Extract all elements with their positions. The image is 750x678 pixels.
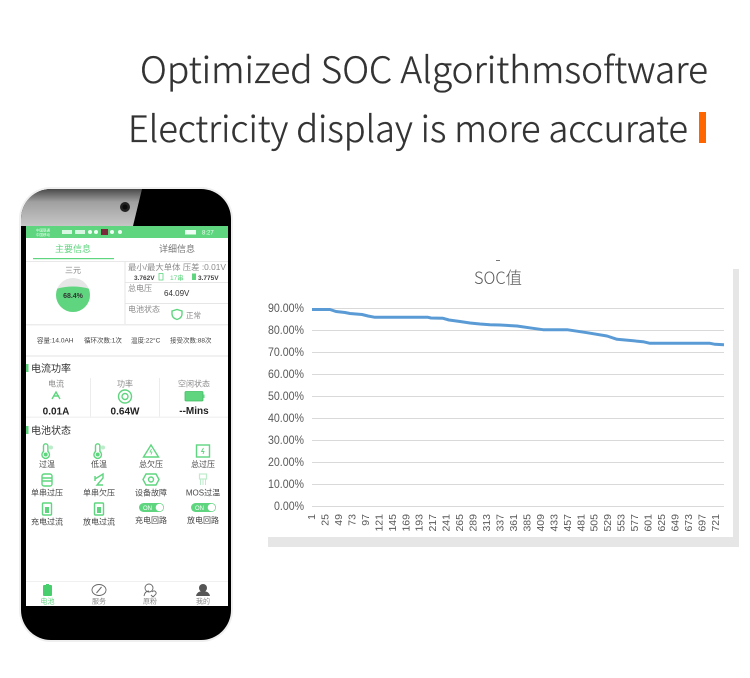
idle state metric: --Mins: [179, 406, 209, 417]
nav: service: [92, 584, 106, 606]
x axis labels: 673: [683, 514, 695, 532]
x axis labels: 625: [656, 514, 668, 532]
tabs: 主要信息: [55, 243, 91, 254]
status bar: 中国移动: [36, 232, 50, 237]
y axis labels: 60.00%: [268, 369, 304, 381]
icon: total over voltage: 总过压: [191, 459, 215, 469]
subtitle: electricity display is more accurate: Electricity display is more accurate: [128, 100, 688, 153]
icon: over temperature: [39, 444, 55, 469]
heading: battery status: 电池状态: [31, 424, 71, 437]
current metric: 0.01A: [43, 406, 69, 418]
icon: MOS over temperature: [186, 474, 220, 498]
line chart: SOC value: [268, 260, 739, 547]
total voltage: 64.09V: [164, 289, 190, 298]
y axis labels: 10.00%: [268, 479, 304, 491]
cell voltage panel: [128, 262, 227, 282]
cell voltage panel: 最小/最大单体 压差 :0.01V: [128, 262, 227, 272]
x axis labels: 73: [346, 514, 358, 526]
cell voltage panel: 17串: [170, 274, 184, 282]
battery stats row: 接受次数:88次: [170, 336, 212, 344]
x axis labels: 1: [306, 514, 318, 520]
x axis labels: 97: [360, 514, 372, 526]
x axis labels: 49: [333, 514, 345, 526]
icon: total under voltage: 总欠压: [139, 459, 163, 469]
x axis labels: [306, 514, 722, 532]
battery status: 电池状态: [128, 304, 160, 314]
nav: battery: [40, 584, 54, 606]
phone screen: [26, 226, 228, 606]
phone body: [19, 187, 233, 642]
icon: device fault: 设备故障: [135, 488, 167, 498]
icon: charge circuit toggle: [135, 503, 167, 525]
y axis labels: 20.00%: [268, 457, 304, 469]
x axis labels: 265: [454, 514, 466, 532]
chart shadow frame: [268, 269, 739, 547]
status bar: 8:27: [202, 230, 214, 236]
icon: front camera: [120, 202, 130, 212]
status bar: [26, 226, 228, 238]
power metric: 功率: [117, 378, 133, 388]
current metric: [43, 378, 69, 418]
icon: charge over current: 充电过流: [31, 516, 63, 526]
icon: charge circuit toggle: ON: [143, 506, 152, 512]
x axis labels: 649: [670, 514, 682, 532]
icon: cell under voltage: [83, 474, 115, 498]
icon: low temperature: [91, 444, 107, 469]
y axis labels: 70.00%: [268, 347, 304, 359]
icon: charge circuit toggle: 充电回路: [135, 515, 167, 525]
x axis labels: 577: [629, 514, 641, 532]
x axis labels: 313: [481, 514, 493, 532]
x axis labels: 721: [710, 514, 722, 532]
x axis labels: 409: [535, 514, 547, 532]
nav: mine: [196, 584, 210, 606]
icon: total over voltage: [191, 445, 215, 469]
icon: MOS over temperature: MOS过温: [186, 488, 220, 498]
x axis labels: 601: [643, 514, 655, 532]
x axis labels: 361: [508, 514, 520, 532]
battery stats row: 容量:14.0AH: [37, 336, 74, 344]
SOC data line: [312, 310, 724, 345]
x axis labels: 241: [441, 514, 453, 532]
phone mockup: [19, 187, 233, 642]
icon: low temperature: 低温: [91, 459, 107, 469]
y axis labels: 30.00%: [268, 435, 304, 447]
cell voltage panel: 3.762V: [134, 275, 155, 282]
x axis labels: 529: [602, 514, 614, 532]
icon: discharge circuit toggle: ON: [195, 506, 204, 512]
x axis labels: 457: [562, 514, 574, 532]
icon: cell over voltage: [31, 474, 63, 498]
x axis labels: 385: [521, 514, 533, 532]
bottom navigation: [40, 584, 210, 606]
nav: service: 服务: [92, 596, 106, 606]
total voltage: 总电压: [128, 283, 152, 293]
icon: over temperature: 过温: [39, 459, 55, 469]
cell voltage panel: 3.775V: [198, 275, 219, 282]
battery status: [128, 304, 201, 320]
x axis labels: 217: [427, 514, 439, 532]
nav: fans: [143, 584, 157, 606]
idle state metric: 空闲状态: [178, 378, 210, 388]
battery type pie chart: [56, 266, 90, 312]
nav: fans: 原粉: [143, 596, 157, 606]
chart title: SOC值: [474, 264, 522, 289]
icon: charge over current: [31, 503, 63, 526]
heading: current and power: 电流功率: [31, 362, 71, 375]
x axis labels: 25: [320, 514, 332, 526]
x axis labels: 433: [548, 514, 560, 532]
x axis labels: 337: [494, 514, 506, 532]
x axis labels: 553: [616, 514, 628, 532]
orange accent bar: [699, 112, 706, 143]
x axis labels: 145: [387, 514, 399, 532]
icon: discharge over current: 放电过流: [83, 516, 115, 526]
x axis labels: 505: [589, 514, 601, 532]
status icon grid: [31, 444, 220, 526]
idle state metric: [178, 378, 210, 417]
power metric: [111, 378, 140, 418]
battery stats row: [37, 336, 212, 344]
icon: discharge over current: [83, 503, 115, 526]
battery type pie chart: 三元: [65, 266, 81, 275]
tabs: [33, 243, 195, 259]
y axis labels: 80.00%: [268, 325, 304, 337]
x axis labels: 289: [468, 514, 480, 532]
y axis labels: 50.00%: [268, 391, 304, 403]
icon: total under voltage: [139, 445, 163, 469]
nav: mine: 我的: [196, 596, 210, 606]
x axis labels: 481: [575, 514, 587, 532]
y axis labels: 40.00%: [268, 413, 304, 425]
icon: cell over voltage: 单串过压: [31, 488, 63, 498]
battery type pie chart: 68.4%: [63, 293, 84, 300]
icon: discharge circuit toggle: 放电回路: [187, 515, 219, 525]
total voltage: [128, 283, 190, 298]
x axis labels: 193: [414, 514, 426, 532]
x axis labels: 697: [696, 514, 708, 532]
battery stats row: 循环次数:1次: [84, 336, 122, 344]
title: optimized SOC algorithm software: Optimized SOC Algorithmsoftware: [140, 41, 708, 94]
battery status: 正常: [186, 311, 201, 320]
y axis labels: [268, 303, 304, 513]
tabs: 详细信息: [159, 243, 195, 254]
battery stats row: 温度:22°C: [131, 336, 161, 344]
power metric: 0.64W: [111, 406, 140, 418]
icon: discharge circuit toggle: [187, 503, 219, 525]
status bar: 中国联通: [36, 228, 50, 232]
icon: device fault: [135, 474, 167, 498]
x axis labels: 121: [373, 514, 385, 532]
y axis labels: 0.00%: [274, 501, 304, 513]
nav: battery: 电池: [40, 596, 54, 606]
current metric: 电流: [48, 378, 64, 388]
grid lines: [312, 308, 724, 506]
icon: cell under voltage: 单串欠压: [83, 488, 115, 498]
y axis labels: 90.00%: [268, 303, 304, 315]
x axis labels: 169: [400, 514, 412, 532]
